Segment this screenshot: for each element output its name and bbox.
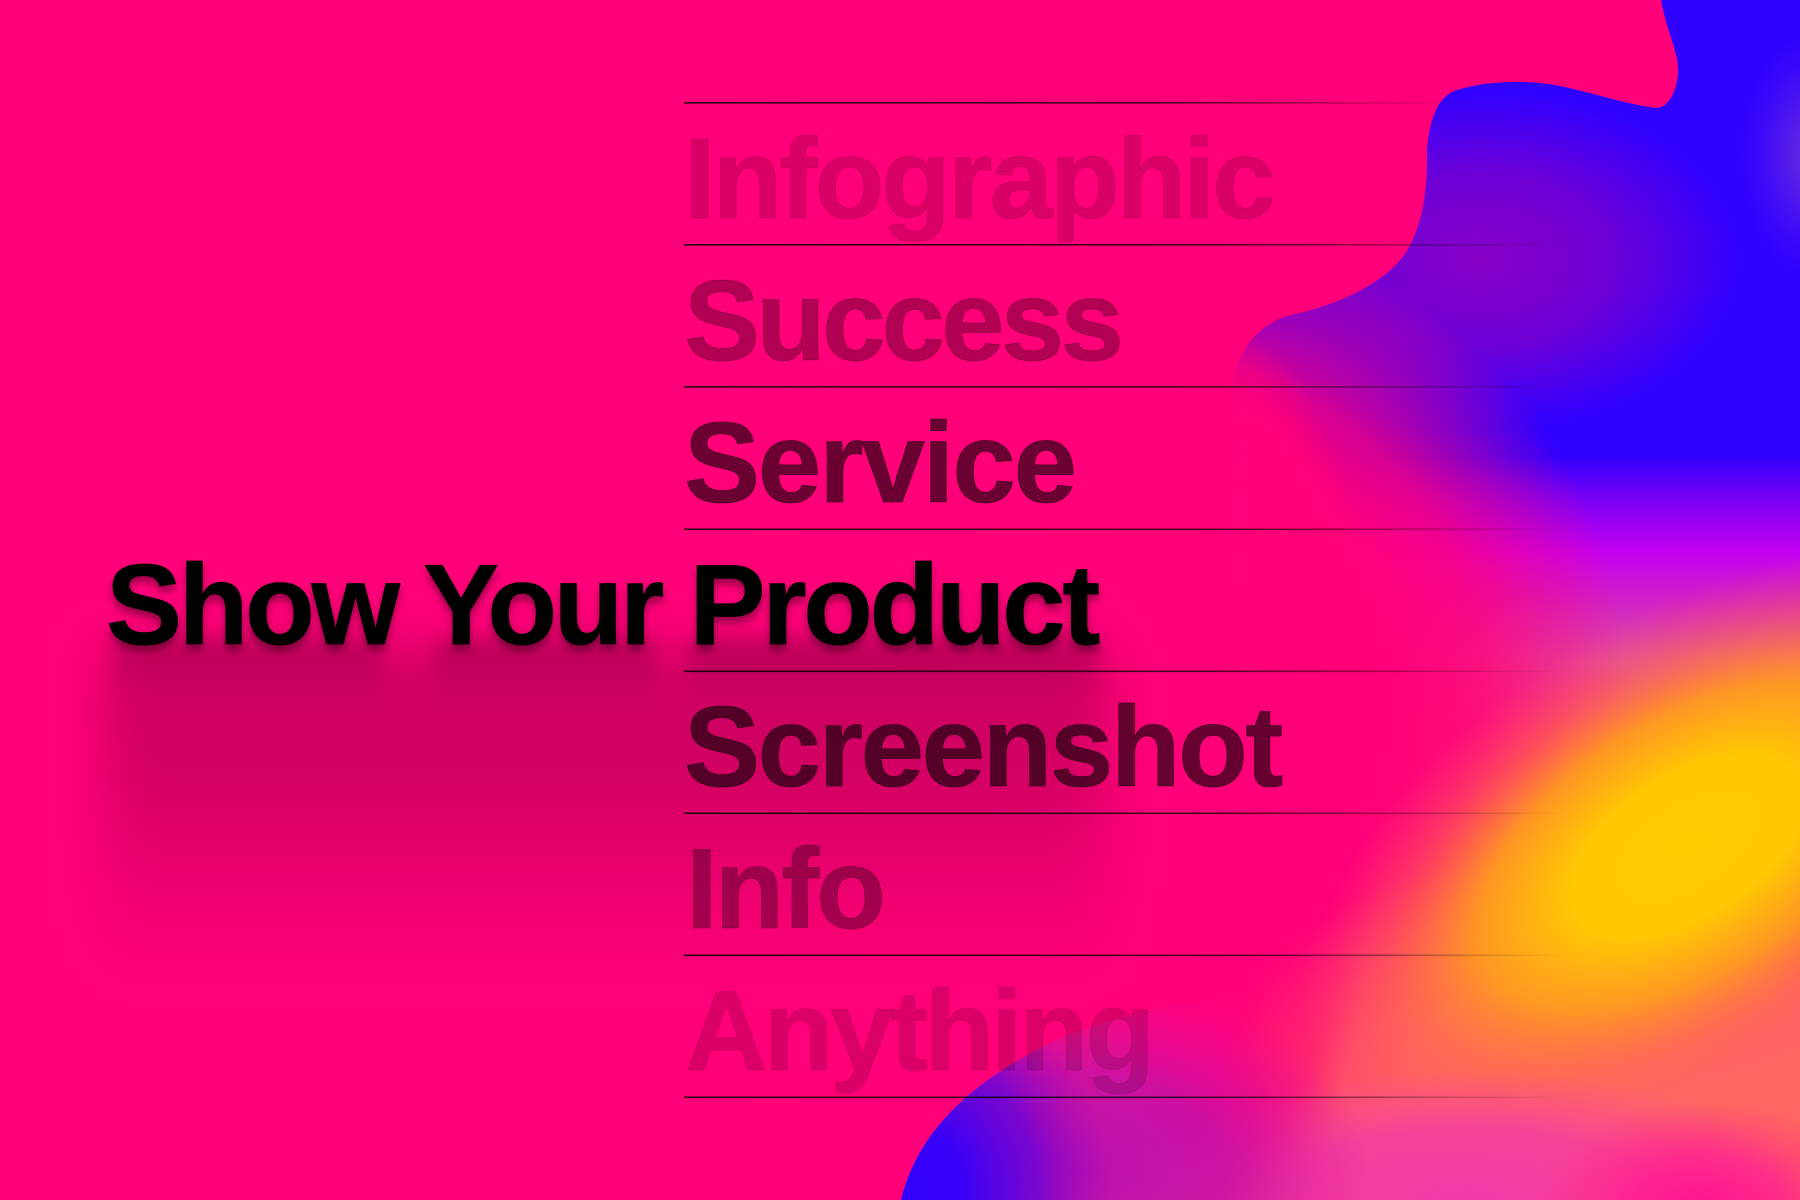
rule lines: [684, 102, 1564, 1098]
word: Service: Service: [684, 400, 1075, 527]
gradient blob: [901, 0, 1800, 1200]
title shadow: [105, 640, 1105, 980]
word: Info: Info: [686, 826, 883, 953]
word: Screenshot: Screenshot: [684, 684, 1281, 811]
headline: Show Your Product: Show Your Product: [106, 542, 1097, 669]
word: Infographic: Infographic: [684, 116, 1273, 243]
word: Success: Success: [684, 258, 1120, 385]
word: Anything: Anything: [685, 968, 1152, 1095]
